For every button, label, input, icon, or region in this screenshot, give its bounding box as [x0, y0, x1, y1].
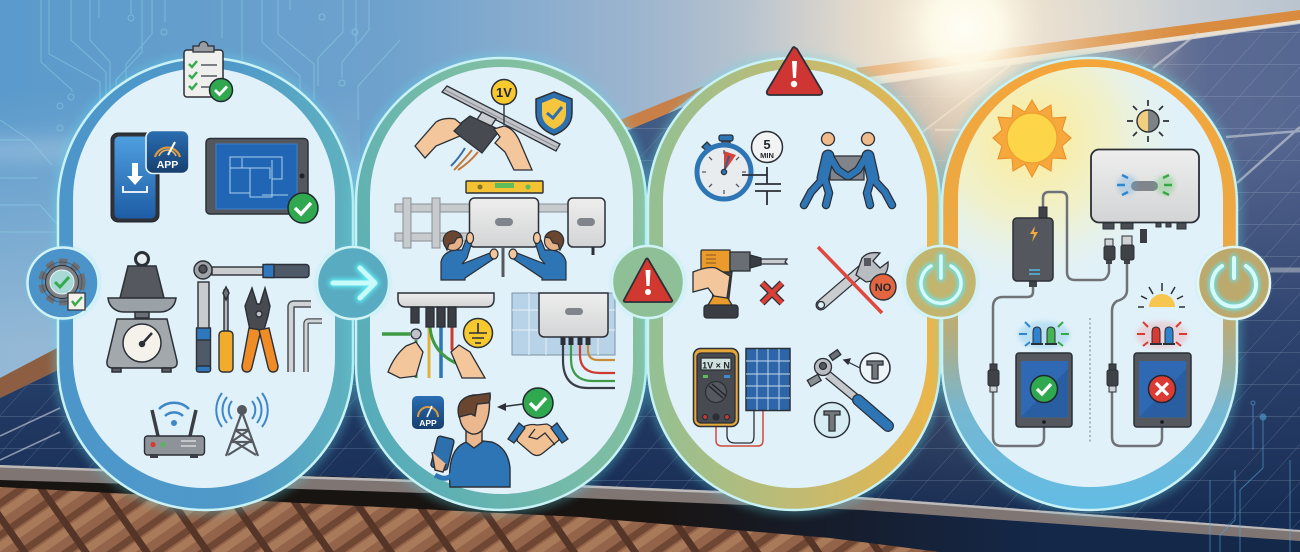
icon: spirit level [466, 181, 543, 193]
icon: warning triangle [767, 47, 822, 95]
icon: commissioning app badge [412, 396, 444, 429]
icon: handshake [508, 423, 568, 456]
icon: hand tools [194, 261, 322, 372]
icon: red and blue beacons [1136, 321, 1188, 349]
icon: power symbol [1212, 258, 1256, 306]
connector: warning [612, 246, 684, 318]
background: panel frame, shadow and tiles [0, 465, 1300, 552]
icon: prohibited adjustable wrench [818, 247, 896, 313]
icon: crimping pliers [242, 288, 278, 372]
icon: wifi router [144, 403, 204, 458]
icon: USB connectors on cables [988, 364, 1118, 392]
icon: glowing arrow [333, 268, 375, 298]
icon: power symbol [921, 256, 961, 303]
icon: blue and green beacons [1018, 321, 1070, 349]
icon: prohibited drill [693, 250, 787, 318]
icon: app badge: APP [157, 159, 178, 171]
icon: power bank [1013, 207, 1053, 287]
icon: screwdriver [219, 287, 233, 372]
divider dotted [1089, 318, 1091, 442]
icon: 1V label: 1V [496, 85, 512, 100]
background: circuit traces [0, 0, 400, 232]
icon: five minutes badge [752, 132, 782, 162]
connector: power button right [1198, 247, 1270, 319]
icon: phone with app download [111, 130, 189, 222]
connector: power button [905, 246, 977, 318]
icon: installer with phone [430, 393, 510, 487]
icon: NO badge: NO [875, 282, 892, 294]
icon: hex keys [291, 304, 322, 372]
icon: multimeter and PV panel: 1V × N [702, 360, 730, 370]
icon: inverter with PV cables [512, 293, 615, 388]
icon: 1V label [492, 80, 516, 125]
icon: warning triangle [624, 258, 672, 302]
icon: gear with check [42, 262, 85, 310]
background: roof ridge [615, 86, 704, 132]
background: lower circuit traces [1210, 401, 1290, 552]
icon: five minutes badge: 5 [763, 137, 771, 152]
connector: settings gear check [27, 247, 99, 319]
icon: sunrise [1138, 283, 1185, 307]
icon: tablet with blueprint [206, 138, 318, 223]
icon: cell tower [216, 393, 268, 456]
icon: USB plugs [1104, 236, 1134, 264]
icon: inverter with status lights [1091, 150, 1199, 264]
icon: two people carrying [804, 132, 892, 205]
icon: sun [993, 100, 1071, 177]
panel: power on and status [942, 58, 1237, 510]
panel: safety warnings [648, 47, 940, 510]
icon: wall rails [395, 198, 570, 248]
icon: two installers lifting [441, 231, 566, 280]
icon: ratchet and bolts [807, 350, 890, 438]
panel: mounting and wiring [356, 58, 646, 510]
icon: ground symbol [464, 318, 492, 348]
cables [993, 192, 1162, 446]
icon: DC and ground wiring [382, 293, 494, 378]
icon: small solar panel [746, 348, 790, 410]
icon: good-status tablet [1016, 321, 1072, 427]
icon: shield [536, 92, 572, 135]
icon: five minutes badge: MIN [760, 151, 774, 160]
icon: clipboard checklist [184, 42, 232, 102]
icon: inverter on rails [470, 198, 605, 277]
icon: half-shaded sun [1127, 100, 1169, 142]
panel: preparation [58, 42, 353, 510]
icon: red cross [762, 283, 782, 303]
icon: check with arrow [497, 388, 553, 418]
icon: stopwatch and capacitor [697, 132, 782, 205]
icon: torque wrench [194, 261, 309, 372]
icon: hands mounting module on rail [415, 80, 572, 170]
icon: bolt magnifier top [860, 353, 890, 383]
icon: commissioning app badge: APP [419, 418, 437, 428]
icon: fault-status tablet [1134, 321, 1191, 427]
icon: bolt magnifier bottom [814, 402, 850, 438]
background: sunlight [0, 0, 1300, 260]
icon: weight on scale [107, 252, 177, 372]
connector: arrow to next step [317, 247, 389, 319]
icon: multimeter and PV panel [694, 348, 790, 446]
